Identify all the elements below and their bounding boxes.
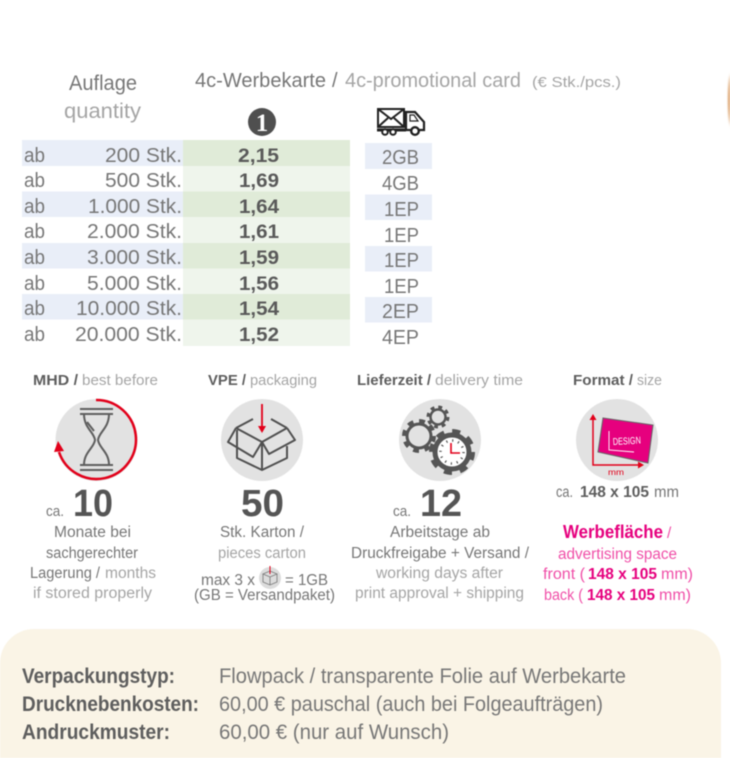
quantity row backgrounds <box>22 140 183 320</box>
shipping units: 2EP <box>382 301 419 323</box>
heading: Format <box>573 372 662 389</box>
text: storage description: sachgerechter <box>46 545 138 562</box>
row: proof sample: Andruckmuster: <box>22 721 170 744</box>
heading: Lieferzeit: Lieferzeit / <box>357 372 432 389</box>
quantity labels: ab <box>24 221 45 243</box>
value: 12 days <box>393 483 462 525</box>
quantity labels: 20.000 Stk. <box>75 324 182 346</box>
quantity labels: ab <box>24 324 45 346</box>
heading: Format: size <box>637 372 662 389</box>
price column backgrounds <box>183 140 350 346</box>
prices: 1,54 <box>239 299 279 320</box>
prices <box>238 146 279 346</box>
heading: VPE: packaging <box>250 372 317 389</box>
row: proof sample: 60,00 € (nur auf Wunsch) <box>219 721 449 744</box>
text: carton description: pieces carton <box>218 545 306 562</box>
text: carton description: Stk. Karton / <box>220 524 305 541</box>
text: advertising space: front ( <box>543 566 586 583</box>
text: size value <box>556 484 679 501</box>
table header: (€ Stk./pcs.) <box>532 74 621 91</box>
text: storage description: months <box>105 565 156 582</box>
quantity labels: 200 Stk. <box>105 145 182 167</box>
text: size value: 148 x 105 <box>580 484 649 501</box>
quantity labels: 5.000 Stk. <box>87 273 182 295</box>
shipping units <box>382 147 419 349</box>
shipping units: 1EP <box>384 250 419 272</box>
text: storage description: if stored properly <box>33 585 152 602</box>
heading: MHD: MHD / <box>33 372 79 389</box>
icon: open box <box>221 399 303 481</box>
row: packaging type: Verpackungstyp: <box>22 665 175 688</box>
table header: quantity <box>64 100 142 123</box>
text: carton description <box>218 524 306 562</box>
prices: 1,56 <box>239 274 279 295</box>
icon: card format <box>576 399 658 481</box>
icon: gears with clock <box>399 399 481 481</box>
text: delivery description: working days after <box>375 565 503 582</box>
quantity labels: 1.000 Stk. <box>88 196 182 218</box>
quantity labels: ab <box>24 247 45 269</box>
text: storage description <box>30 524 156 602</box>
table header: 4c-Werbekarte <box>195 70 326 92</box>
panel: MHD best before <box>30 372 158 602</box>
prices: 1,59 <box>239 248 279 269</box>
heading: Format: Format / <box>573 372 634 389</box>
heading: MHD <box>33 372 158 389</box>
value: 50 pieces: 50 <box>241 483 284 525</box>
text: shipping package note <box>194 572 335 604</box>
quantity labels <box>24 145 182 346</box>
heading: Lieferzeit <box>357 372 523 389</box>
text: size value: mm <box>654 484 679 501</box>
shipping units: 4EP <box>382 327 419 349</box>
heading: VPE <box>208 372 317 389</box>
value: 12 days: ca. <box>393 503 411 520</box>
prices: 1,61 <box>239 222 279 243</box>
value: 10 months: ca. <box>46 503 64 520</box>
panel: VPE packaging <box>194 372 335 604</box>
text: storage description: Lagerung / <box>30 565 101 582</box>
quantity labels: ab <box>24 196 45 218</box>
text: storage description: Monate bei <box>54 524 131 541</box>
table header: / <box>332 70 338 92</box>
quantity labels: ab <box>24 145 45 167</box>
text: advertising space: advertising space <box>558 546 677 563</box>
icon: small box <box>259 566 281 589</box>
shipping units: 4GB <box>382 173 419 195</box>
row: proof sample <box>22 721 449 744</box>
text: advertising space: mm) <box>661 566 693 583</box>
row: additional print costs <box>22 693 603 716</box>
value: 12 days: 12 <box>420 483 462 525</box>
icon: card format: mm <box>608 468 624 477</box>
text: shipping package note: max 3 x <box>201 572 255 589</box>
text: delivery description: Druckfreigabe + Versand / <box>351 545 530 562</box>
text: advertising space: 148 x 105 <box>588 566 657 583</box>
text: advertising space: 148 x 105 <box>587 587 655 604</box>
text: advertising space: back ( <box>544 587 584 604</box>
decorative edge image <box>728 73 730 127</box>
quantity labels: ab <box>24 170 45 192</box>
text: shipping package note: = 1GB <box>285 572 328 589</box>
panel: Format size <box>543 372 693 604</box>
prices: 1,69 <box>239 171 279 192</box>
quantity labels: 2.000 Stk. <box>87 221 182 243</box>
quantity labels: ab <box>24 298 45 320</box>
text: delivery description: print approval + shipping <box>355 585 524 602</box>
heading: Lieferzeit: delivery time <box>435 372 523 389</box>
price table <box>22 140 432 349</box>
shipping row backgrounds <box>365 143 432 322</box>
quantity labels: ab <box>24 273 45 295</box>
text: shipping package note: (GB = Versandpaket) <box>194 587 335 604</box>
icon: mail truck <box>377 109 424 135</box>
table header: Auflage <box>69 72 137 95</box>
heading: MHD: best before <box>82 372 158 389</box>
table header <box>64 70 621 123</box>
icon: number one badge <box>248 108 276 137</box>
icon: number one badge: 1 <box>256 110 268 137</box>
prices: 1,52 <box>239 325 279 346</box>
heading: VPE: VPE / <box>208 372 247 389</box>
value: 10 months: 10 <box>73 483 113 525</box>
row: additional print costs: Drucknebenkosten: <box>22 693 199 716</box>
quantity labels: 500 Stk. <box>105 170 182 192</box>
icon: hourglass with red arrow <box>54 399 138 481</box>
prices: 1,64 <box>239 197 279 218</box>
row: packaging type <box>22 665 626 688</box>
text: advertising space: mm) <box>659 587 691 604</box>
shipping units: 1EP <box>384 225 419 247</box>
panel: Lieferzeit delivery time <box>351 372 530 602</box>
table header: 4c-promotional card <box>345 70 521 92</box>
quantity labels: 3.000 Stk. <box>87 247 182 269</box>
quantity labels: 10.000 Stk. <box>76 298 182 320</box>
text: size value: ca. <box>556 484 573 501</box>
icon: card format: DESIGN <box>613 436 641 448</box>
value: 10 months <box>46 483 113 525</box>
shipping units: 2GB <box>382 147 419 169</box>
row: additional print costs: 60,00 € pauschal (auch bei Folgeaufträgen) <box>219 693 603 716</box>
text: advertising space: / <box>667 525 672 542</box>
panel: additional information <box>0 629 721 758</box>
text: advertising space: Werbefläche <box>563 522 663 542</box>
row: packaging type: Flowpack / transparente Folie auf Werbekarte <box>219 665 626 688</box>
text: delivery description <box>351 524 530 602</box>
shipping units: 1EP <box>384 276 419 298</box>
shipping units: 1EP <box>384 199 419 221</box>
text: advertising space <box>543 522 693 604</box>
prices: 2,15 <box>238 146 279 167</box>
text: delivery description: Arbeitstage ab <box>390 524 490 541</box>
